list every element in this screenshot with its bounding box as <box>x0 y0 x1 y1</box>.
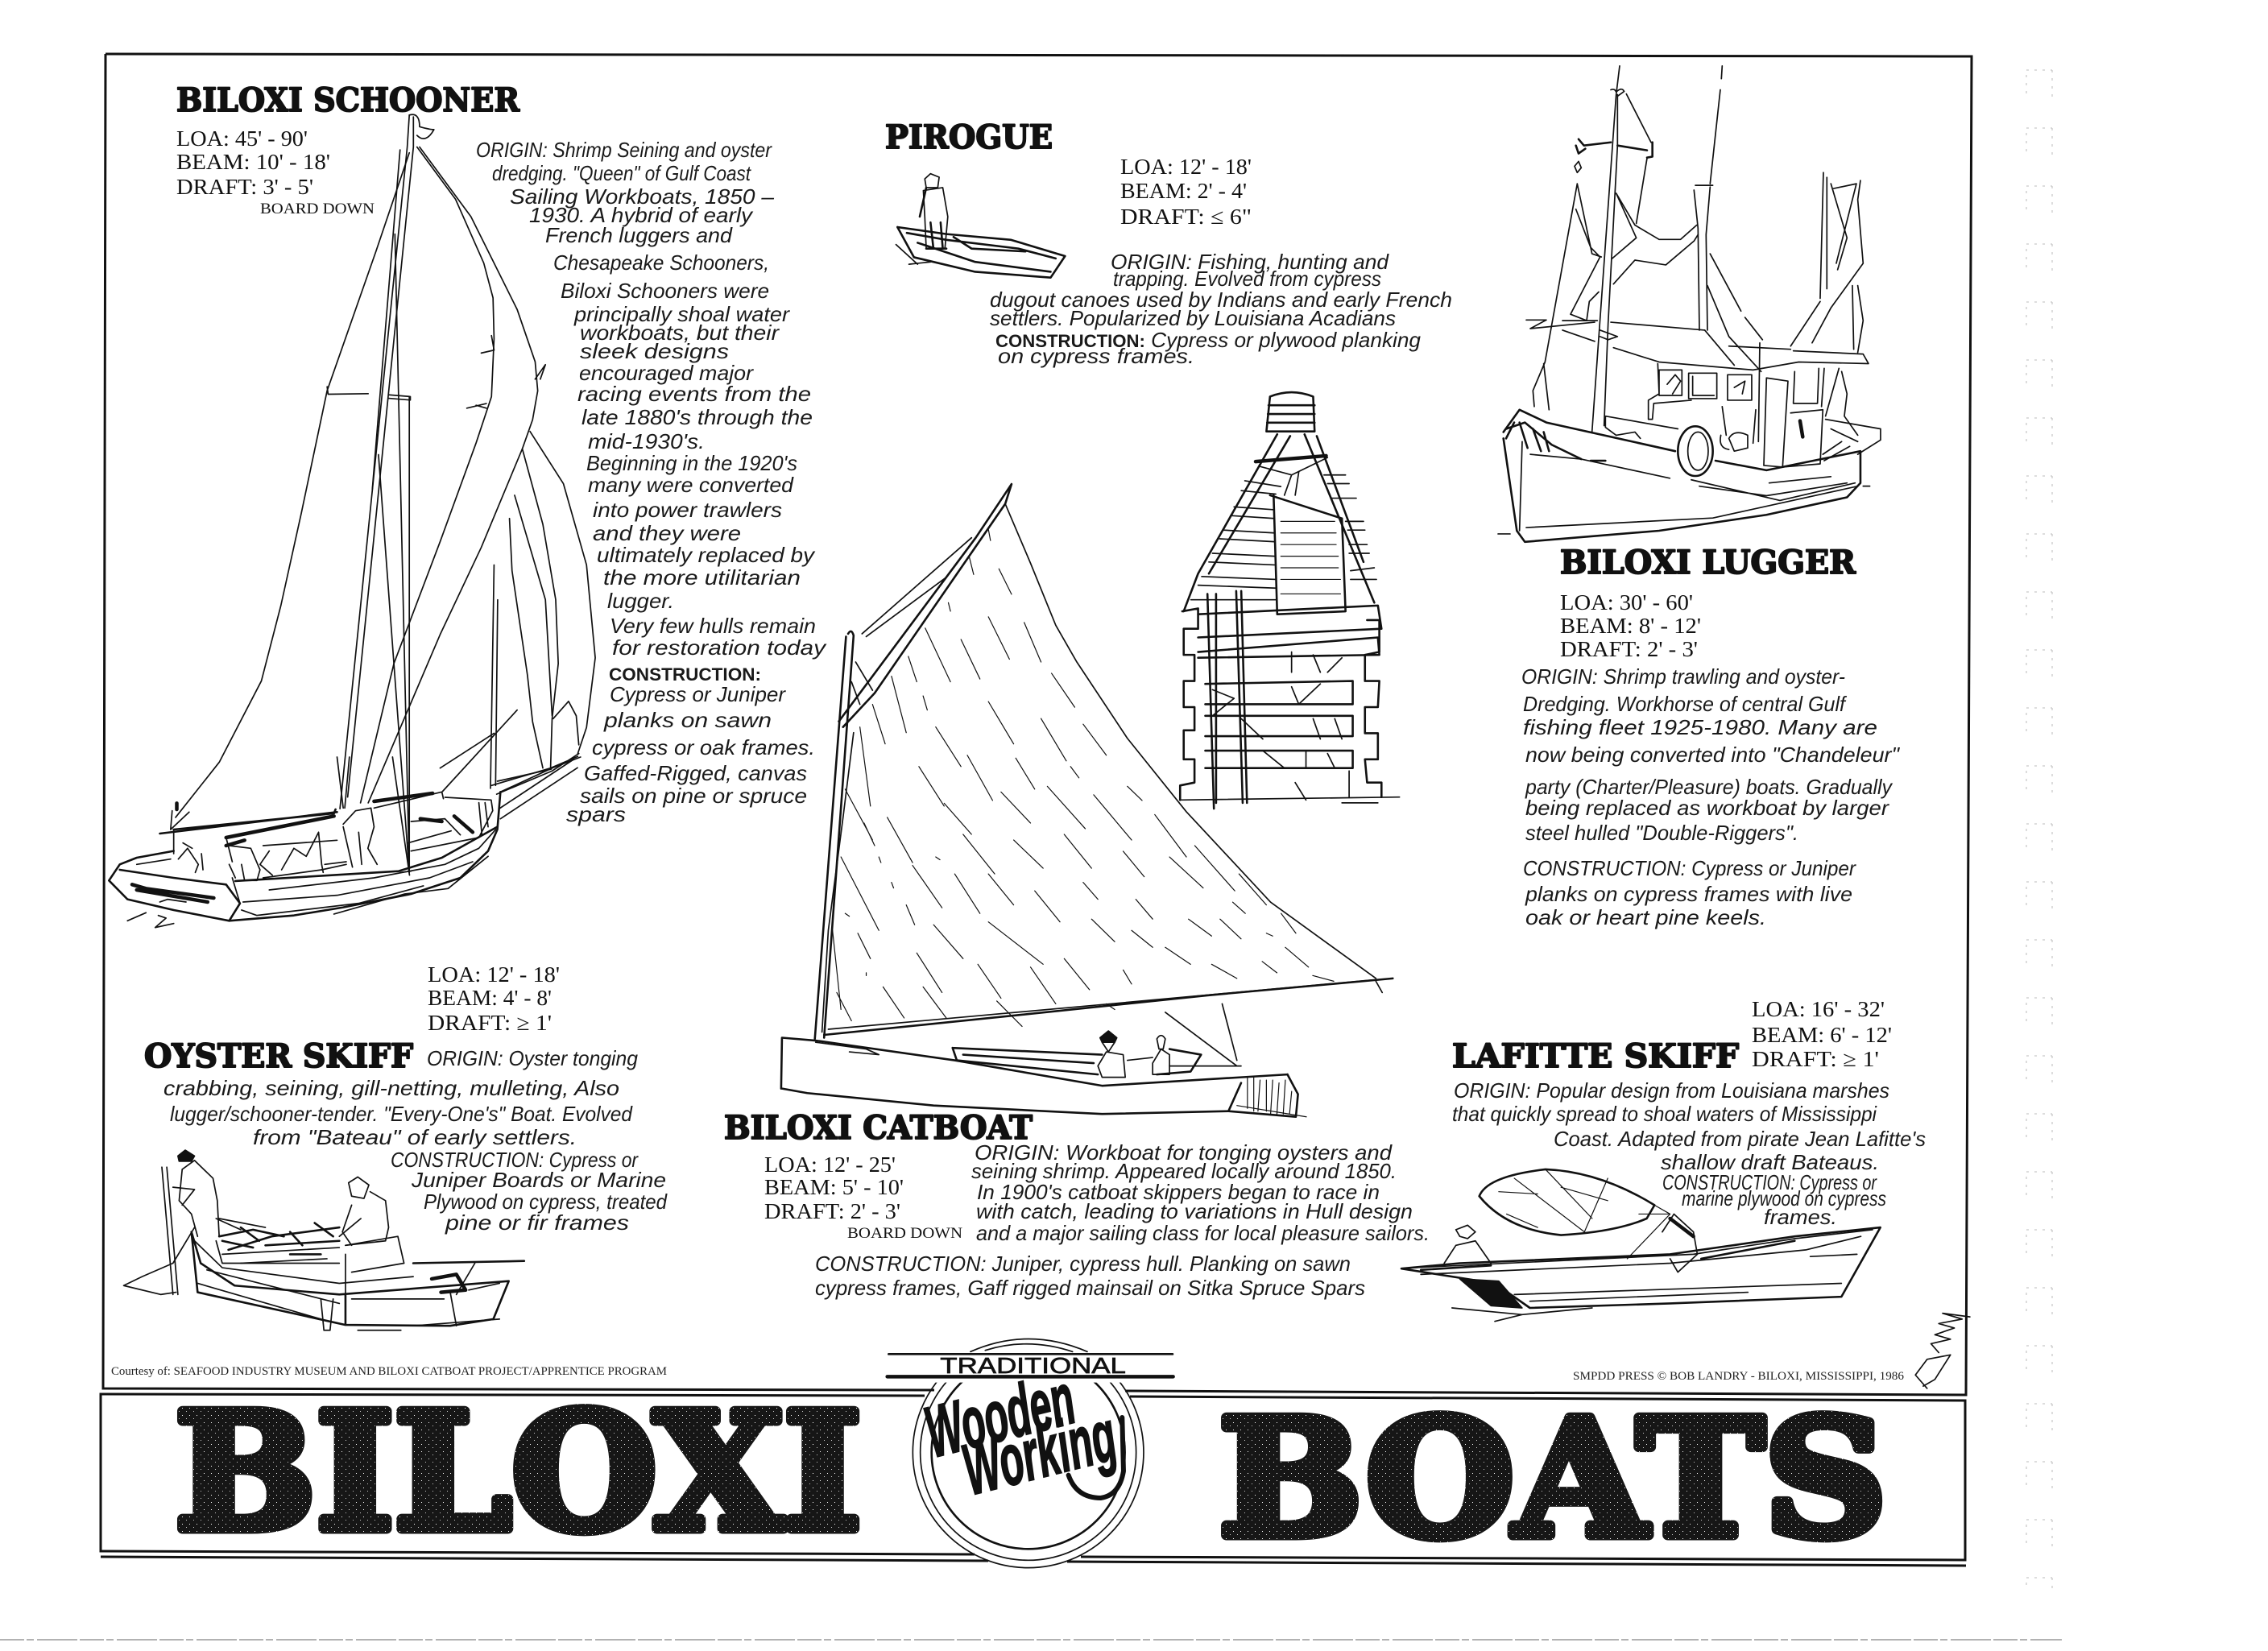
notes: Biloxi Catboat origin and construction: and a major sailing class for local pleasure sailors. <box>976 1221 1430 1245</box>
notes: Biloxi Schooner origin and construction: spars <box>566 802 626 826</box>
specs: Biloxi Catboat: BEAM: 5' - 10' <box>764 1175 904 1199</box>
notes: Biloxi Schooner origin and construction: late 1880's through the <box>581 405 813 429</box>
notes: Oyster Skiff origin and construction: ORIGIN: Oyster tonging <box>427 1046 639 1070</box>
notes: Biloxi Schooner origin and construction: cypress or oak frames. <box>592 735 815 759</box>
notes: Biloxi Schooner origin and construction: principally shoal water <box>573 302 790 326</box>
notes: Oyster Skiff origin and construction: Juniper Boards or Marine <box>411 1168 666 1192</box>
notes: Biloxi Lugger origin and construction: CONSTRUCTION: Cypress or Juniper <box>1523 856 1856 880</box>
notes: Biloxi Schooner origin and construction: CONSTRUCTION: <box>609 664 761 685</box>
specs: Biloxi Lugger: LOA: 30' - 60' <box>1560 590 1693 614</box>
title: Biloxi Schooner: BILOXI SCHOONER <box>176 81 520 119</box>
specs: Biloxi Schooner: BEAM: 10' - 18' <box>176 150 330 174</box>
notes: Biloxi Schooner origin and construction: Beginning in the 1920's <box>586 451 797 475</box>
credit: press and copyright line: SMPDD PRESS © BOB LANDRY - BILOXI, MISSISSIPPI, 1986 <box>1573 1370 1904 1383</box>
notes: Pirogue origin and construction: dugout canoes used by Indians and early French <box>990 288 1452 312</box>
notes: Lafitte Skiff origin and construction: shallow draft Bateaus. <box>1661 1150 1879 1174</box>
notes: Lafitte Skiff origin and construction <box>1452 1078 1926 1229</box>
specs: Biloxi Lugger: BEAM: 8' - 12' <box>1560 614 1701 638</box>
notes: Biloxi Schooner origin and construction: mid-1930's. <box>588 429 705 453</box>
logo word: Working: Working <box>955 1396 1124 1511</box>
notes: Pirogue origin and construction: on cypress frames. <box>998 344 1194 368</box>
notes: Pirogue origin and construction: trapping. Evolved from cypress <box>1113 267 1381 291</box>
notes: Biloxi Schooner origin and construction: planks on sawn <box>603 708 772 732</box>
notes: Biloxi Schooner origin and construction: encouraged major <box>579 361 754 385</box>
notes: Oyster Skiff origin and construction: lugger/schooner-tender. "Every-One's" Boat. Evolved <box>170 1102 633 1126</box>
notes: Biloxi Schooner origin and construction: Very few hulls remain <box>610 614 816 638</box>
notes: Biloxi Schooner origin and construction: ultimately replaced by <box>597 543 816 567</box>
notes: Lafitte Skiff origin and construction: CONSTRUCTION: Cypress or <box>1662 1170 1877 1194</box>
notes: Biloxi Catboat origin and construction: cypress frames, Gaff rigged mainsail on Sitka Spruce Spars <box>815 1276 1365 1300</box>
specs: Oyster Skiff <box>428 962 560 1035</box>
notes: Biloxi Lugger origin and construction: steel hulled "Double-Riggers". <box>1525 821 1798 845</box>
headline: Boats: BOATS <box>1219 1384 1887 1574</box>
notes: Biloxi Catboat origin and construction <box>815 1140 1430 1300</box>
notes: Lafitte Skiff origin and construction: ORIGIN: Popular design from Louisiana marshes <box>1454 1078 1889 1103</box>
notes: Lafitte Skiff origin and construction: frames. <box>1764 1205 1837 1229</box>
page frame <box>103 54 1972 1395</box>
illustration: Biloxi Lugger <box>1498 66 1881 542</box>
specs: Biloxi Schooner <box>176 126 375 217</box>
notes: Biloxi Schooner origin and construction: Sailing Workboats, 1850 – <box>510 184 775 209</box>
notes: Pirogue origin and construction: ORIGIN: Fishing, hunting and <box>1111 250 1390 274</box>
illustration: Biloxi Schooner hull <box>109 757 581 928</box>
signature <box>1915 1314 1970 1388</box>
notes: Lafitte Skiff origin and construction: that quickly spread to shoal waters of Mississippi <box>1452 1102 1877 1126</box>
notes: Oyster Skiff origin and construction: crabbing, seining, gill-netting, mulleting, Also <box>163 1076 619 1100</box>
notes: Biloxi Schooner origin and construction: Gaffed-Rigged, canvas <box>584 761 807 785</box>
credit: museum courtesy line: Courtesy of: SEAFOOD INDUSTRY MUSEUM AND BILOXI CATBOAT PROJECT/APPRENTICE PROGRAM <box>111 1365 667 1378</box>
notes: Lafitte Skiff origin and construction: marine plywood on cypress <box>1682 1186 1886 1210</box>
notes: Oyster Skiff origin and construction: Plywood on cypress, treated <box>424 1190 668 1214</box>
notes: Biloxi Catboat origin and construction: seining shrimp. Appeared locally around 1850. <box>971 1159 1397 1183</box>
specs: Lafitte Skiff: BEAM: 6' - 12' <box>1752 1023 1892 1047</box>
logo word: Traditional: TRADITIONAL <box>940 1353 1126 1378</box>
specs: Pirogue: LOA: 12' - 18' <box>1120 155 1252 179</box>
notes: Biloxi Schooner origin and construction: into power trawlers <box>593 498 782 522</box>
specs: Oyster Skiff: BEAM: 4' - 8' <box>428 986 552 1010</box>
title: Pirogue: PIROGUE <box>885 118 1053 156</box>
title: Lafitte Skiff: LAFITTE SKIFF <box>1452 1037 1739 1075</box>
notes: Oyster Skiff origin and construction <box>163 1046 668 1235</box>
notes: Oyster Skiff origin and construction: from "Bateau" of early settlers. <box>253 1125 577 1149</box>
logo word: Wooden: Wooden <box>917 1359 1082 1473</box>
notes: Biloxi Schooner origin and construction: lugger. <box>607 589 674 613</box>
notes: Biloxi Schooner origin and construction: ORIGIN: Shrimp Seining and oyster <box>476 138 772 162</box>
notes: Biloxi Lugger origin and construction: planks on cypress frames with live <box>1525 882 1852 906</box>
title: Biloxi Lugger: BILOXI LUGGER <box>1560 544 1856 581</box>
notes: Biloxi Schooner origin and construction: 1930. A hybrid of early <box>529 203 754 227</box>
notes: Biloxi Schooner origin and construction: Cypress or Juniper <box>610 682 786 706</box>
specs: Lafitte Skiff: DRAFT: ≥ 1' <box>1752 1047 1879 1071</box>
notes: Biloxi Schooner origin and construction: the more utilitarian <box>603 565 801 590</box>
specs: Pirogue <box>1120 155 1252 229</box>
specs: Pirogue: DRAFT: ≤ 6" <box>1120 205 1252 229</box>
notes: Biloxi Schooner origin and construction: workboats, but their <box>580 321 780 345</box>
notes: Biloxi Lugger origin and construction <box>1521 664 1901 929</box>
illustration: Pirogue with standing figure <box>896 174 1065 278</box>
notes: Biloxi Schooner origin and construction: Biloxi Schooners were <box>561 279 769 303</box>
notes: Biloxi Lugger origin and construction: ORIGIN: Shrimp trawling and oyster- <box>1521 664 1845 689</box>
notes: Pirogue origin and construction <box>990 250 1452 368</box>
illustration: Biloxi Catboat <box>781 484 1393 1117</box>
notes: Biloxi Catboat origin and construction: In 1900's catboat skippers began to race in <box>977 1180 1380 1204</box>
illustration: Oyster Skiff with two figures <box>124 1150 524 1330</box>
specs: Biloxi Lugger <box>1560 590 1701 661</box>
notes: Biloxi Lugger origin and construction: being replaced as workboat by larger <box>1525 796 1889 820</box>
notes: Biloxi Catboat origin and construction: ORIGIN: Workboat for tonging oysters and <box>975 1140 1393 1165</box>
notes: Biloxi Schooner origin and construction <box>476 138 827 826</box>
illustration: oyster cage crib tower <box>1180 392 1400 809</box>
title: Oyster Skiff: OYSTER SKIFF <box>144 1037 413 1075</box>
specs: Biloxi Catboat: LOA: 12' - 25' <box>764 1152 896 1177</box>
specs: Biloxi Schooner: LOA: 45' - 90' <box>176 126 308 151</box>
specs: Biloxi Catboat <box>764 1152 962 1242</box>
notes: Biloxi Schooner origin and construction: and they were <box>593 521 741 545</box>
specs: Biloxi Schooner: DRAFT: 3' - 5' <box>176 175 313 199</box>
headline: Biloxi: BILOXI <box>175 1378 862 1567</box>
specs: Biloxi Catboat: BOARD DOWN <box>847 1225 962 1242</box>
notes: Oyster Skiff origin and construction: CONSTRUCTION: Cypress or <box>391 1148 639 1172</box>
title: Biloxi Catboat: BILOXI CATBOAT <box>724 1109 1033 1147</box>
notes: Biloxi Catboat origin and construction: CONSTRUCTION: Juniper, cypress hull. Planking on sawn <box>815 1252 1351 1276</box>
notes: Biloxi Schooner origin and construction: dredging. "Queen" of Gulf Coast <box>492 161 752 185</box>
notes: Biloxi Schooner origin and construction: many were converted <box>588 473 795 497</box>
scan edge line <box>0 1639 2062 1641</box>
notes: Biloxi Catboat origin and construction: with catch, leading to variations in Hull design <box>976 1199 1413 1223</box>
notes: Biloxi Lugger origin and construction: now being converted into "Chandeleur" <box>1525 743 1901 767</box>
specs: Biloxi Catboat: DRAFT: 2' - 3' <box>764 1199 900 1223</box>
notes: Biloxi Schooner origin and construction: racing events from the <box>577 382 811 406</box>
specs: Biloxi Schooner: BOARD DOWN <box>260 201 375 217</box>
logo tail of the g <box>1069 1417 1124 1498</box>
specs: Oyster Skiff: LOA: 12' - 18' <box>428 962 560 987</box>
notes: Lafitte Skiff origin and construction: Coast. Adapted from pirate Jean Lafitte's <box>1554 1127 1926 1151</box>
notes: Biloxi Schooner origin and construction: sails on pine or spruce <box>580 784 807 808</box>
specs: Pirogue: BEAM: 2' - 4' <box>1120 179 1247 203</box>
illustration: Biloxi Schooner sails and rigging <box>176 114 595 872</box>
notes: Biloxi Lugger origin and construction: fishing fleet 1925-1980. Many are <box>1523 715 1877 739</box>
specs: Oyster Skiff: DRAFT: ≥ 1' <box>428 1011 552 1035</box>
notes: Biloxi Lugger origin and construction: party (Charter/Pleasure) boats. Gradually <box>1525 775 1893 799</box>
hole punch ghost marks <box>2025 68 2057 1591</box>
specs: Lafitte Skiff: LOA: 16' - 32' <box>1752 997 1885 1021</box>
specs: Biloxi Lugger: DRAFT: 2' - 3' <box>1560 637 1698 661</box>
banner panel <box>101 1394 1966 1566</box>
specs: Lafitte Skiff <box>1752 997 1892 1071</box>
notes: Biloxi Lugger origin and construction: oak or heart pine keels. <box>1525 905 1766 929</box>
notes: Pirogue origin and construction: settlers. Popularized by Louisiana Acadians <box>990 306 1396 330</box>
notes: Biloxi Schooner origin and construction: French luggers and <box>545 223 734 247</box>
logo: Traditional Wooden Working <box>888 1337 1173 1568</box>
notes: Biloxi Schooner origin and construction: Chesapeake Schooners, <box>553 250 769 275</box>
illustration: Lafitte Skiff with cast net <box>1401 1169 1881 1322</box>
notes: Pirogue origin and construction: CONSTRUCTION: Cypress or plywood planking <box>995 328 1422 352</box>
notes: Biloxi Schooner origin and construction: sleek designs <box>580 339 729 363</box>
notes: Biloxi Lugger origin and construction: Dredging. Workhorse of central Gulf <box>1523 692 1848 716</box>
notes: Oyster Skiff origin and construction: pine or fir frames <box>445 1210 629 1235</box>
notes: Biloxi Schooner origin and construction: for restoration today <box>612 635 827 660</box>
